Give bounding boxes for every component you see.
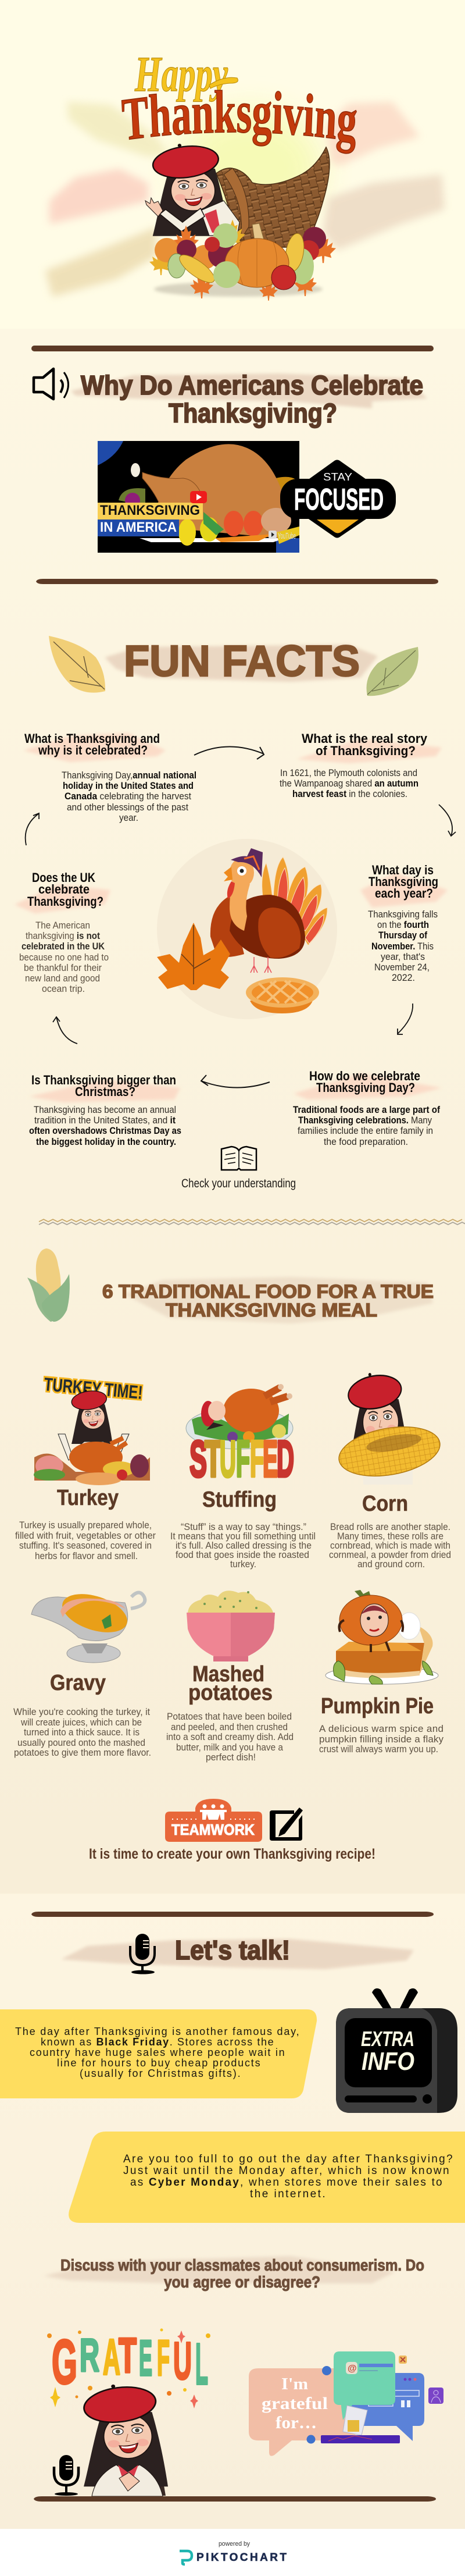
panel: why do Americans celebrate — [34, 369, 427, 553]
fact: what day: Thanksgiving falls — [368, 909, 438, 920]
gravy boat illustration — [31, 1586, 145, 1663]
stay focused badge: FOCUSED — [294, 483, 384, 517]
stuffed lettering: U — [220, 1430, 236, 1488]
fact: how do we celebrate: Thanksgiving Day? — [316, 1080, 415, 1095]
stuffed lettering — [189, 1430, 294, 1488]
discussion prompt: you agree or disagree? — [164, 2273, 320, 2291]
turkey description: Turkey is usually prepared whole, — [19, 1520, 152, 1531]
gravy description: usually poured onto the mashed — [17, 1737, 145, 1748]
icon: open book — [221, 1147, 256, 1170]
corn description: cornmeal, a powder from dried — [329, 1549, 451, 1560]
pumpkin pie description: A delicious warm spice and — [319, 1723, 443, 1734]
heading: Let's talk! — [175, 1935, 290, 1965]
panel: footer — [180, 2541, 287, 2564]
corn description: cornbread, which is made with — [330, 1540, 450, 1551]
stuffing description: “Stuff” is a way to say “things.” — [181, 1521, 306, 1532]
callout: Cyber Monday — [69, 2132, 465, 2223]
mashed potato bowl illustration — [187, 1591, 275, 1661]
recipe call to action: It is time to create your own Thanksgiving recipe! — [89, 1846, 375, 1862]
callout: Black Friday — [0, 2009, 317, 2098]
divider — [36, 579, 438, 584]
extra info TV: EXTRA — [361, 2027, 414, 2051]
heading — [102, 1281, 434, 1321]
fact: what day: November 24, — [374, 962, 430, 973]
fact: UK: celebrate — [38, 882, 90, 896]
callout: Black Friday: (usually for Christmas gifts). — [80, 2068, 241, 2079]
video label: IN AMERICA — [100, 520, 177, 535]
grateful lettering: F — [157, 2331, 170, 2386]
grateful lettering: T — [119, 2328, 137, 2383]
divider — [31, 346, 434, 351]
stuffed illustration — [186, 1384, 294, 1488]
heading brush — [125, 1277, 433, 1323]
fact: UK: The American — [35, 920, 90, 931]
corn description: Bread rolls are another staple. — [330, 1521, 450, 1532]
grateful lettering: A — [103, 2329, 120, 2385]
Piktochart wordmark: PIKTOCHART — [196, 2552, 287, 2564]
fact: bigger than Christmas: Thanksgiving has become an annual — [34, 1104, 176, 1115]
fact: real story: harvest feast in the colonies. — [292, 788, 407, 799]
mashed potatoes description: Potatoes that have been boiled — [167, 1711, 292, 1722]
panel: let's talk: L — [195, 2332, 208, 2397]
turkey description — [15, 1520, 156, 1561]
discussion prompt — [44, 2256, 424, 2291]
fact: UK: be thankful for their — [24, 962, 102, 973]
callout: Black Friday: known as Black Friday. Stores across the — [41, 2036, 274, 2048]
stuffed lettering: F — [250, 1430, 264, 1488]
arrow — [398, 1004, 413, 1034]
heading: FUN FACTS — [124, 636, 360, 685]
Thanksgiving title: Thanksgiving — [121, 90, 357, 154]
turkey description: stuffing. It's seasoned, covered in — [19, 1540, 152, 1551]
fact: what is Thanksgiving: why is it celebrated? — [38, 743, 148, 757]
teamwork badge — [165, 1799, 262, 1842]
food titles row 2: Mashed — [192, 1662, 264, 1687]
extra info TV — [336, 1988, 457, 2113]
powered by: powered by — [219, 2541, 250, 2547]
gravy description: turned into a thick sauce. It is — [24, 1727, 140, 1738]
mashed potatoes description: and peeled, and then crushed — [171, 1721, 288, 1732]
pumpkin pie description: pumpkin filling inside a flaky — [319, 1734, 444, 1745]
fact: what is Thanksgiving: Canada celebrating the harvest — [65, 791, 191, 802]
fact: real story: of Thanksgiving? — [316, 743, 416, 758]
fact: UK: new land and good — [25, 973, 100, 984]
fact: real story: What is the real story — [302, 731, 428, 746]
arrow — [194, 746, 264, 759]
food titles row 2: potatoes — [188, 1681, 273, 1705]
fact: how do we celebrate: the food preparation. — [324, 1136, 408, 1147]
fact: what is Thanksgiving: year. — [119, 812, 138, 823]
bitmoji waving — [145, 143, 239, 236]
gravy description: While you're cooking the turkey, it — [13, 1706, 150, 1717]
callout: Cyber Monday: the internet. — [250, 2188, 326, 2200]
fact: what day: on the fourth — [377, 919, 429, 930]
icon: notepad and pencil — [270, 1808, 303, 1841]
food titles row 1 — [57, 1486, 408, 1516]
arrow — [53, 1017, 77, 1044]
stuffing description: food that goes inside the roasted — [176, 1549, 309, 1560]
turkey description: filled with fruit, vegetables or other — [15, 1530, 156, 1541]
arrow — [26, 813, 39, 845]
stuffing description — [170, 1521, 316, 1570]
stay focused badge — [280, 460, 396, 538]
pumpkin pie description — [319, 1723, 444, 1755]
fact: how do we celebrate: families include the entire family in — [298, 1125, 433, 1136]
Happy flourish — [209, 77, 238, 88]
corn description: and ground corn. — [357, 1559, 425, 1570]
heading brush — [105, 645, 378, 682]
food titles row 2 — [50, 1662, 434, 1718]
gravy description — [13, 1706, 151, 1758]
heading: Why Do Americans Celebrate — [81, 370, 423, 400]
icon: microphone — [54, 2455, 78, 2496]
fact: bigger than Christmas: Christmas? — [75, 1084, 135, 1099]
turkey description: herbs for flavor and smell. — [35, 1550, 138, 1561]
stuffed lettering: S — [189, 1430, 207, 1488]
food titles row 1: Turkey — [57, 1486, 119, 1510]
fact: how do we celebrate — [293, 1069, 440, 1147]
speech bubble: I'm grateful for: grateful — [262, 2394, 328, 2413]
fact: what day: What day is — [372, 863, 434, 877]
stuffing description: turkey. — [230, 1559, 256, 1570]
stuffed lettering: T — [205, 1430, 222, 1488]
fact: UK: Does the UK — [32, 870, 95, 885]
gravy description: potatoes to give them more flavor. — [14, 1747, 151, 1758]
fact: real story: the Wampanoag shared an autumn — [280, 778, 419, 789]
fact: real story: In 1621, the Plymouth colonists and — [280, 767, 417, 778]
pumpkin pie description: crust will always warm you up. — [319, 1744, 438, 1755]
fact: bigger than Christmas — [29, 1073, 181, 1147]
mashed potatoes description: into a soft and creamy dish. Add — [166, 1731, 294, 1742]
fact: real story — [280, 731, 428, 799]
fact: what day: year, that's — [381, 951, 425, 962]
speech bubble: I'm grateful for: I'm — [281, 2375, 308, 2393]
fact: UK: Thanksgiving? — [27, 894, 103, 909]
fact: UK: celebrated in the UK — [22, 941, 105, 952]
mashed potatoes description — [166, 1711, 294, 1763]
fact: what day: Thursday of — [378, 930, 427, 941]
YouTube mark: YouTube — [278, 531, 296, 541]
callout: Cyber Monday: Are you too full to go out the day after Thanksgiving? — [123, 2153, 453, 2165]
fact: UK: thanksgiving is not — [26, 930, 100, 941]
food titles row 1: Stuffing — [202, 1488, 277, 1512]
stuffing description: It means that you fill something until — [170, 1531, 316, 1542]
fact: what day: Thanksgiving — [369, 874, 438, 889]
fact: how do we celebrate: Traditional foods are a large part of — [293, 1104, 440, 1115]
heading: Thanksgiving? — [169, 398, 337, 428]
heading highlights — [15, 733, 448, 1102]
YouTube mark — [269, 531, 296, 541]
turkey — [210, 848, 327, 973]
food titles row 2: Pumpkin Pie — [321, 1694, 434, 1718]
teamwork badge: TEAMWORK — [171, 1821, 255, 1838]
stuffed lettering: E — [263, 1430, 278, 1488]
speech bubble: I'm grateful for — [249, 2368, 356, 2456]
cornucopia — [216, 147, 330, 247]
fact: what day: 2022. — [392, 972, 415, 983]
confetti — [47, 2328, 210, 2408]
corn eater illustration — [335, 1372, 444, 1485]
chat illustration — [307, 2351, 443, 2443]
fact: how do we celebrate: Thanksgiving celebrations. Many — [298, 1115, 432, 1126]
turkey illustration — [34, 1374, 150, 1485]
fact: what day: November. This — [371, 941, 434, 952]
arrow — [439, 805, 456, 836]
fact: what is Thanksgiving: Thanksgiving Day,annual national — [62, 770, 196, 781]
Happy script: Happy — [134, 46, 228, 102]
check your understanding: Check your understanding — [181, 1177, 296, 1190]
callout: Black Friday: country have huge sales where people wait in — [30, 2047, 285, 2058]
icon: speaker — [34, 369, 69, 399]
centre illustration: turkey and pie — [157, 839, 337, 1019]
bitmoji grateful — [81, 2383, 168, 2496]
fact: UK: because no one had to — [19, 952, 109, 963]
grateful lettering: G — [52, 2326, 77, 2397]
panel: traditional food: D — [277, 1430, 294, 1488]
heading: 6 TRADITIONAL FOOD FOR A TRUE — [102, 1281, 434, 1302]
arrow — [201, 1075, 270, 1088]
chat illustration: @ — [348, 2364, 357, 2374]
grateful lettering: R — [80, 2329, 99, 2381]
heading — [81, 370, 423, 428]
fact: UK: ocean trip. — [42, 983, 85, 994]
pumpkin pie illustration — [326, 1590, 438, 1684]
fact: bigger than Christmas: Is Thanksgiving bigger than — [31, 1073, 176, 1087]
hero brush strokes — [45, 102, 445, 297]
icon: Piktochart logo — [180, 2551, 192, 2564]
corn description — [329, 1521, 451, 1570]
heading brush — [61, 1939, 414, 1969]
fact: bigger than Christmas: the biggest holiday in the country. — [36, 1136, 176, 1147]
icon: play button — [190, 491, 207, 503]
icon: corn — [27, 1248, 70, 1322]
gravy description: will create juices, which can be — [20, 1717, 142, 1728]
grateful lettering — [52, 2326, 208, 2397]
food titles row 1: Corn — [362, 1492, 408, 1516]
icon: green leaf — [366, 647, 419, 696]
fact: how do we celebrate: How do we celebrate — [309, 1069, 420, 1083]
video label — [98, 503, 203, 536]
fact: bigger than Christmas: often overshadows Christmas Day as — [29, 1125, 181, 1136]
divider — [31, 1912, 434, 1917]
turkey illustration: TURKEY TIME! — [43, 1374, 144, 1403]
fact: what day — [368, 863, 438, 983]
video label: THANKSGIVING — [100, 503, 200, 518]
icon: microphone — [130, 1934, 155, 1974]
stuffing description: it's full. Also called dressing is the — [176, 1540, 312, 1551]
harvest pile — [149, 220, 336, 301]
wavy divider — [39, 1219, 465, 1225]
callout: Cyber Monday: as Cyber Monday, when stores move their sales to — [130, 2176, 442, 2189]
extra info TV: INFO — [362, 2047, 414, 2076]
pumpkin pie — [246, 977, 319, 1013]
stay focused badge: STAY — [323, 471, 352, 483]
corn description: Many times, these rolls are — [337, 1531, 443, 1542]
panel: fun facts — [15, 636, 456, 1190]
divider — [34, 2496, 436, 2502]
mashed potatoes description: butter, milk and you have a — [176, 1742, 283, 1753]
fact: what day: each year? — [375, 886, 433, 901]
grateful lettering: U — [173, 2332, 192, 2390]
fact: what is Thanksgiving: and other blessings of the past — [67, 802, 188, 813]
video thumbnail — [98, 441, 299, 553]
fact: UK — [19, 870, 109, 994]
callout: Cyber Monday: Just wait until the Monday after, which is now known — [123, 2165, 449, 2177]
panel: let's talk — [0, 1934, 465, 2496]
fact: what is Thanksgiving: holiday in the United States and — [63, 780, 194, 791]
heading: THANKSGIVING MEAL — [166, 1300, 377, 1321]
fact: what is Thanksgiving — [24, 731, 196, 823]
maple leaf — [157, 923, 230, 990]
panel: hero — [43, 46, 446, 301]
fact: bigger than Christmas: tradition in the United States, and it — [34, 1115, 176, 1126]
icon: yellow leaf — [49, 636, 105, 693]
food titles row 2: Gravy — [50, 1671, 106, 1695]
grateful lettering: E — [139, 2331, 152, 2386]
speech bubble: I'm grateful for: for… — [276, 2413, 317, 2432]
callout: Black Friday: The day after Thanksgiving is another famous day, — [15, 2026, 299, 2037]
heading brush — [71, 373, 427, 408]
fact: what is Thanksgiving: What is Thanksgiving and — [24, 731, 160, 746]
mashed potatoes description: perfect dish! — [206, 1752, 256, 1763]
callout: Black Friday: line for hours to buy cheap products — [57, 2057, 260, 2069]
stuffed lettering: F — [236, 1430, 250, 1488]
panel: traditional food — [13, 1248, 451, 1862]
